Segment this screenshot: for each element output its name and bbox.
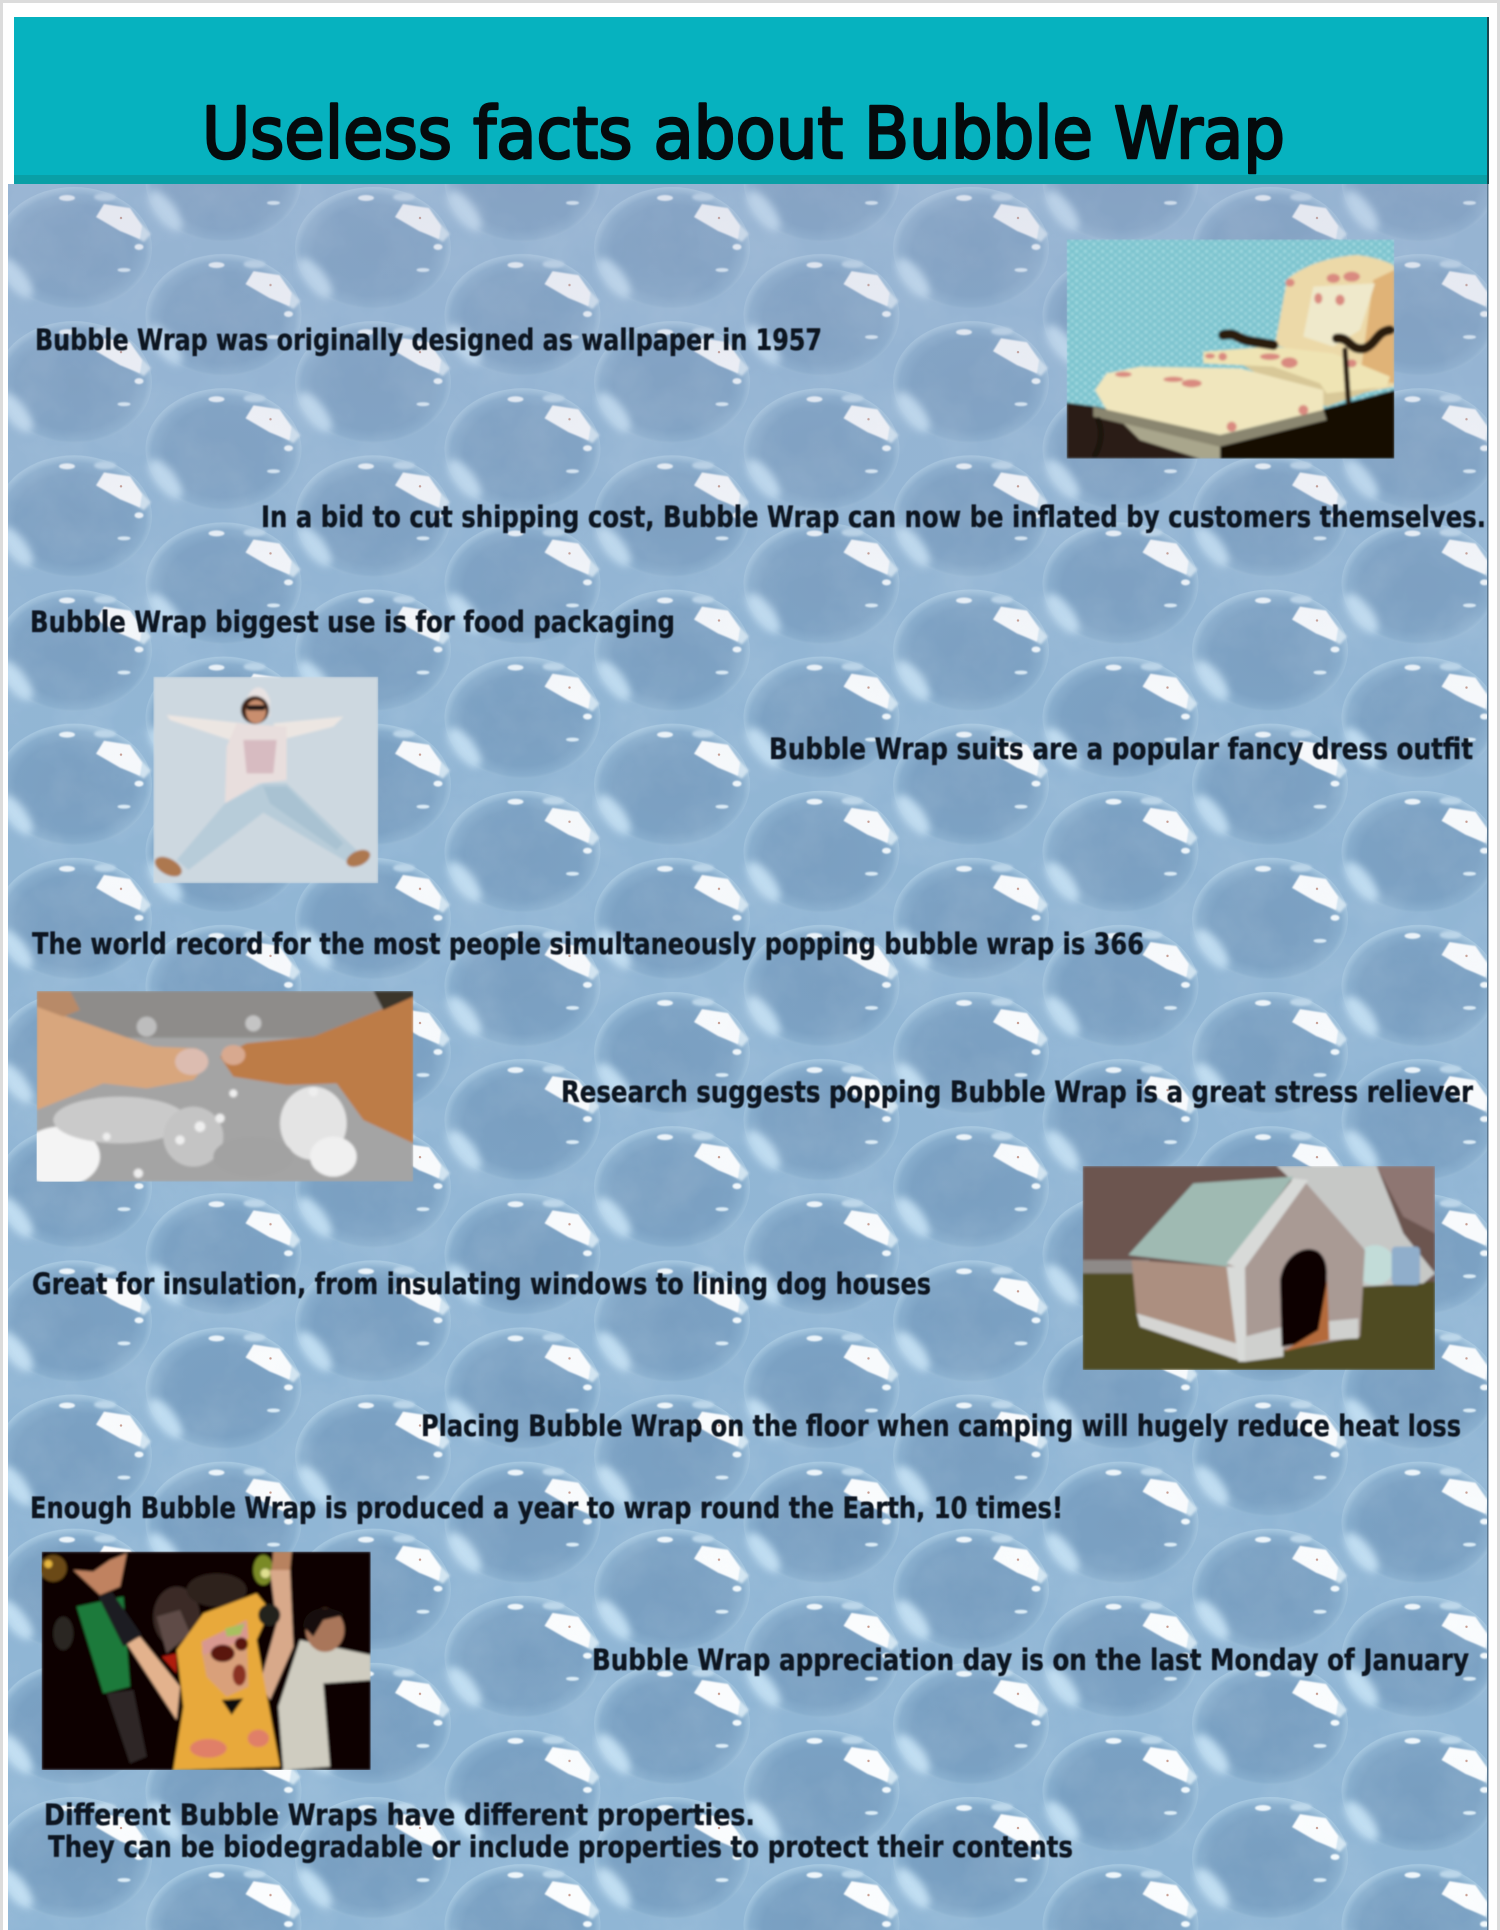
photo: person jumping in bubble wrap suit — [152, 677, 378, 883]
fact: different properties — [44, 1798, 1073, 1864]
fact: wallpaper: Bubble Wrap was originally designed as wallpaper in 1957 — [35, 323, 822, 357]
fact: world record: The world record for the most people simultaneously popping bubble wrap is 366 — [32, 927, 1144, 961]
fact: food packaging: Bubble Wrap biggest use is for food packaging — [30, 605, 675, 639]
fact: wrap round the Earth: Enough Bubble Wrap is produced a year to wrap round the Earth, 10 times! — [30, 1491, 1063, 1525]
photo: bubble wrap covered chaise chair — [1067, 239, 1394, 459]
photo: party goer in costume — [40, 1552, 371, 1770]
title banner — [14, 17, 1489, 184]
fact: different properties: They can be biodegradable or include properties to protect their contents — [48, 1830, 1073, 1864]
fact: insulation: Great for insulation, from insulating windows to lining dog houses — [32, 1267, 931, 1301]
photo: thumbs popping bubble wrap — [20, 991, 413, 1187]
fact: different properties: Different Bubble Wraps have different properties. — [44, 1798, 755, 1832]
title: Useless facts about Bubble Wrap — [202, 92, 1285, 175]
photo: dog house wrapped in bubble wrap — [1083, 1166, 1435, 1370]
